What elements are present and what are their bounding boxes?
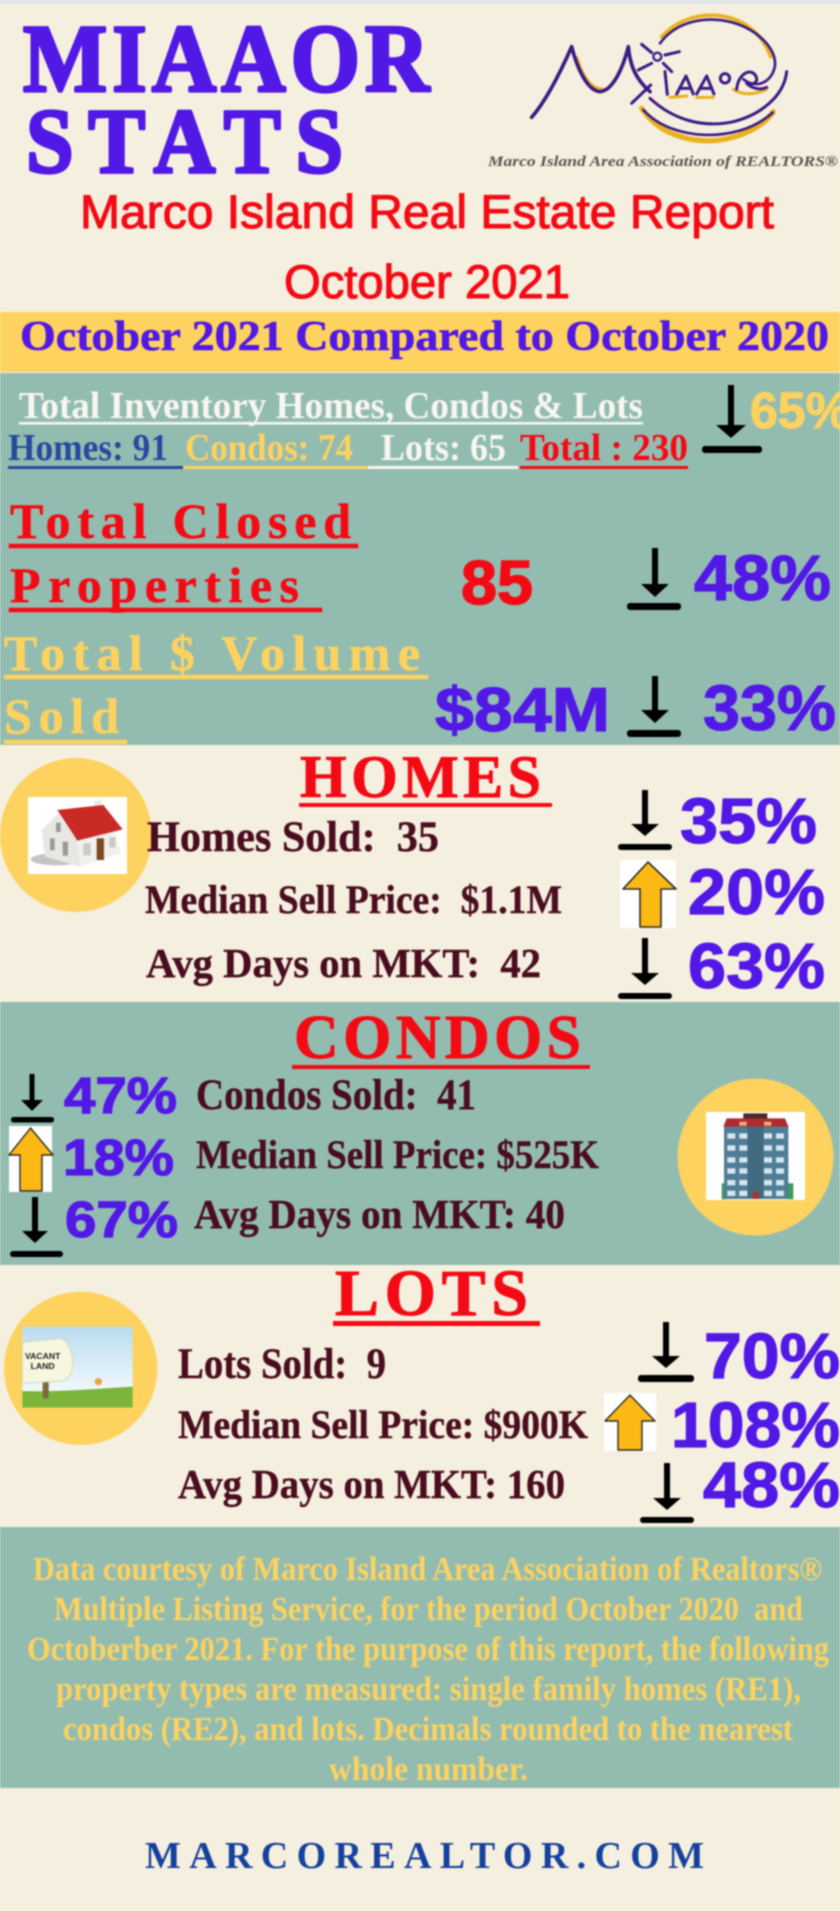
text: condos stats: Median Sell Price: $525K [196, 1132, 599, 1177]
text: inventory counts [8, 427, 688, 469]
icon: house [0, 758, 152, 912]
text: total volume sold label: Total $ Volume [4, 625, 420, 681]
text: inventory counts: Homes: 91 [8, 427, 168, 469]
text: total closed properties label: Properties [10, 557, 299, 613]
text: lots stats [178, 1341, 588, 1507]
text: homes stats: Median Sell Price: $1.1M [145, 877, 562, 922]
title: MIAAOR STATS: STATS [26, 91, 343, 193]
text: lots stats: Avg Days on MKT: 160 [178, 1461, 565, 1507]
title: MIAAOR STATS: MIAAOR [23, 6, 430, 113]
stat: volume sold: $84M [435, 676, 610, 745]
text: total closed properties label [9, 493, 358, 613]
stat: homes days change: 63% [688, 930, 825, 1002]
icon: lots days down arrow [640, 1463, 694, 1523]
text: total volume sold label [4, 625, 428, 744]
icon: closed down arrow [627, 548, 681, 610]
icon: vacant land: LAND [31, 1361, 55, 1371]
icon: condo building [678, 1078, 834, 1236]
footer: website: MARCOREALTOR.COM [145, 1835, 704, 1877]
icon: vacant land [4, 1292, 157, 1445]
stat: volume change: 33% [703, 672, 836, 744]
stat: lots sold change: 70% [704, 1320, 840, 1392]
text: disclaimer [27, 1551, 829, 1788]
icon: homes days down arrow [618, 938, 672, 999]
text: inventory counts: Total : 230 [520, 427, 688, 469]
text: condos stats: Avg Days on MKT: 40 [194, 1191, 565, 1237]
text: condos stats: Condos Sold: 41 [196, 1072, 476, 1119]
panel: condos [0, 1002, 840, 1265]
text: inventory counts: Lots: 65 [381, 427, 506, 469]
text: total volume sold label: Sold [4, 688, 119, 744]
icon: condos days down arrow [10, 1197, 63, 1257]
icon: MIAAOR logo: Marco Island Area Association of REALTORS® [487, 154, 838, 170]
stat: closed properties: 85 [461, 549, 533, 618]
stat: lots price change: 108% [671, 1389, 840, 1461]
text: homes stats [145, 814, 562, 986]
icon: inventory down arrow [702, 385, 762, 453]
text: disclaimer: whole number. [329, 1751, 528, 1788]
text: lots stats: Median Sell Price: $900K [178, 1402, 588, 1447]
stat: homes price change: 20% [688, 856, 825, 928]
text: homes stats: Homes Sold: 35 [147, 814, 439, 861]
text: condos stats [194, 1072, 599, 1237]
heading: condos: CONDOS [294, 1004, 581, 1072]
icon: homes price up arrow [620, 860, 676, 928]
stat: lots days change: 48% [703, 1449, 840, 1521]
text: inventory counts: Condos: 74 [185, 427, 353, 469]
heading: lots: LOTS [335, 1257, 528, 1330]
panel: comparison banner: October 2021 Compared to October 2020 [20, 314, 829, 360]
stat: closed change: 48% [694, 542, 831, 614]
icon: volume down arrow [627, 676, 681, 737]
panel: data source note [0, 1527, 840, 1788]
text: total closed properties label: Total Closed [10, 493, 351, 549]
text: homes stats: Avg Days on MKT: 42 [146, 940, 541, 986]
stat: condos price change: 18% [63, 1129, 174, 1186]
text: lots stats: Lots Sold: 9 [178, 1341, 386, 1388]
panel: lots [0, 1257, 840, 1527]
icon: lots sold down arrow [638, 1322, 694, 1382]
icon: vacant land: VACANT [25, 1351, 61, 1361]
panel: totals [0, 373, 840, 745]
icon: condos sold down arrow [11, 1074, 54, 1122]
stat: homes sold change: 35% [680, 785, 817, 857]
heading: homes: HOMES [300, 744, 541, 810]
icon: condos price up arrow [9, 1126, 53, 1192]
icon: MIAAOR logo [487, 15, 838, 170]
text: total inventory heading: Total Inventory Homes, Condos & Lots [19, 385, 643, 427]
stat: condos sold change: 47% [64, 1067, 177, 1124]
icon: lots price up arrow [604, 1393, 656, 1451]
heading: report title: Marco Island Real Estate Report [80, 185, 774, 238]
icon: homes sold down arrow [618, 790, 672, 850]
stat: condos days change: 67% [65, 1191, 178, 1248]
panel: comparison banner [0, 312, 840, 372]
title: MIAAOR STATS [23, 6, 430, 193]
panel: homes [0, 744, 840, 1002]
heading: report title: October 2021 [284, 255, 570, 308]
panel: header [23, 6, 838, 308]
heading: report title [80, 185, 774, 308]
